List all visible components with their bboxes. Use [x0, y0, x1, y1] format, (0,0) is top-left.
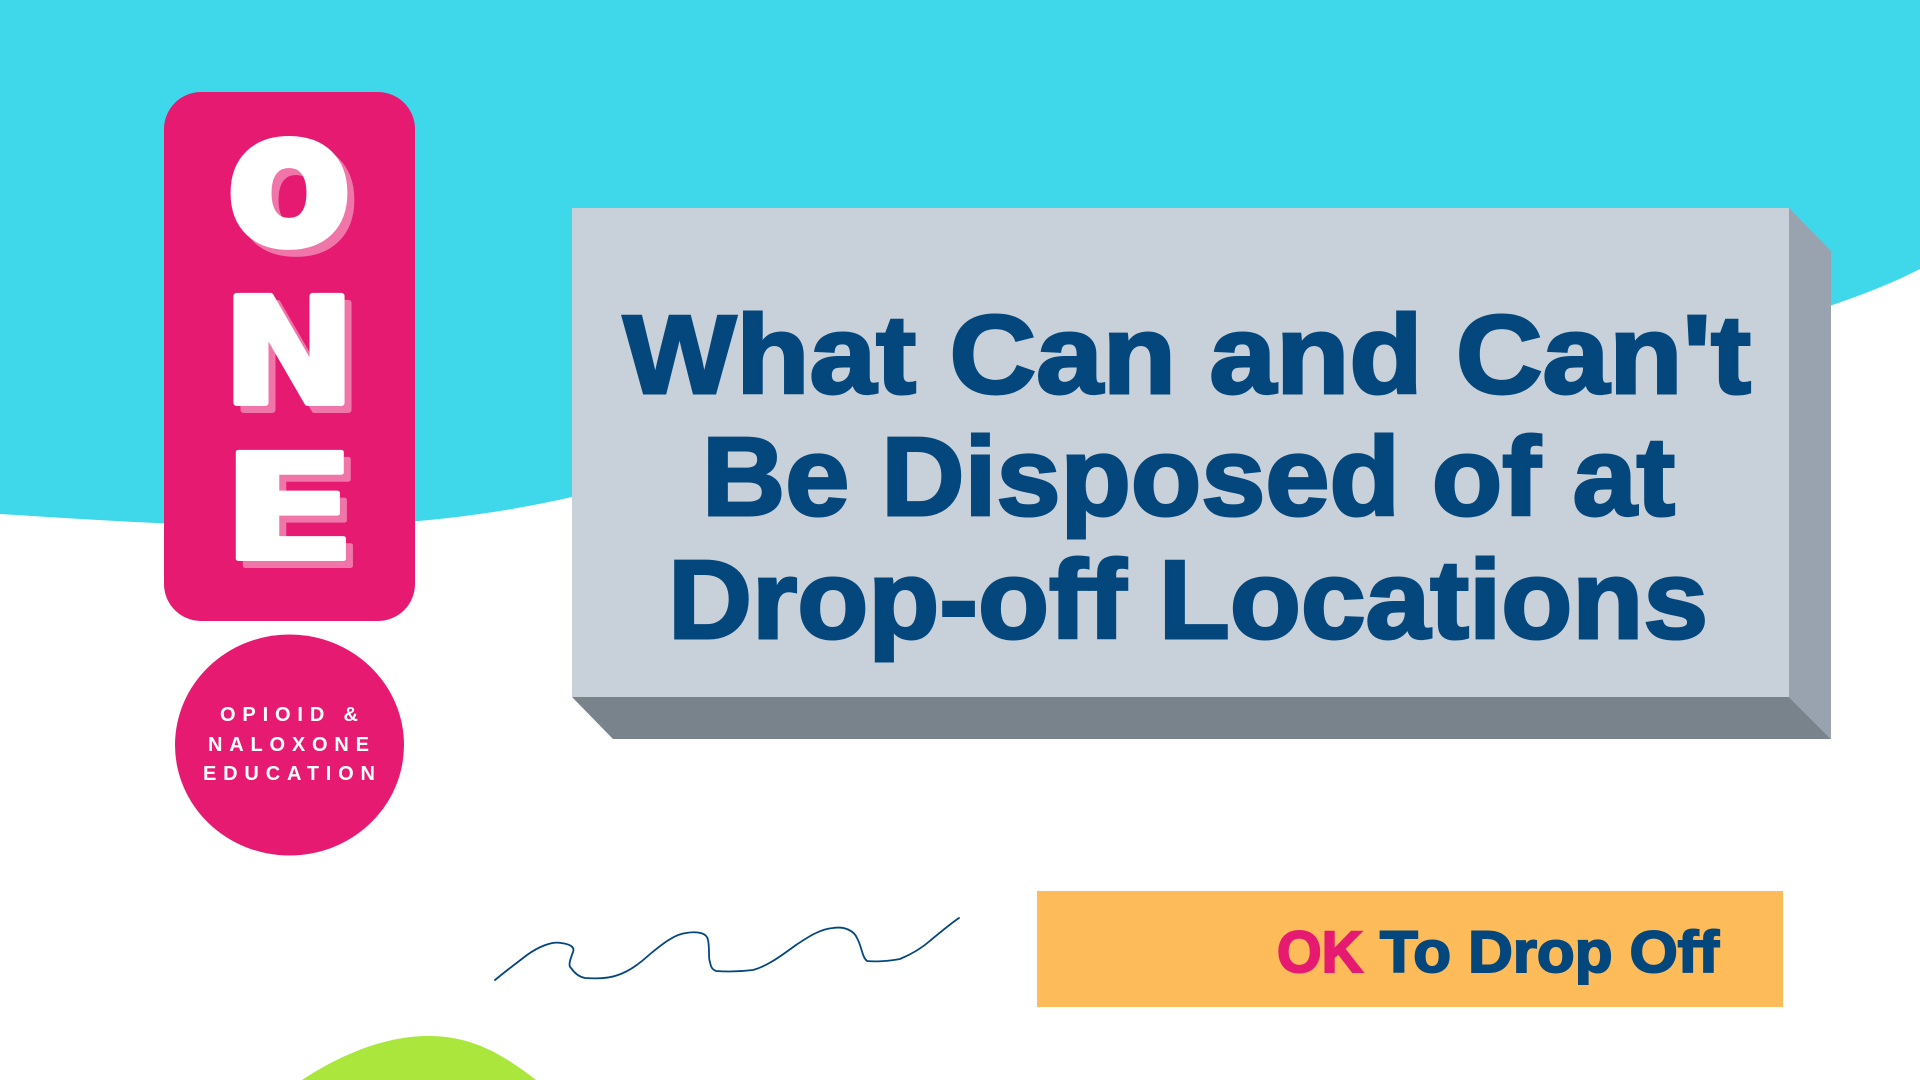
green blob — [302, 1036, 536, 1080]
panel: OK to drop off banner — [1037, 891, 1783, 1007]
panel: opioid and naloxone education badge — [175, 634, 404, 856]
letter N: N — [222, 267, 356, 438]
badge text: EDUCATION — [203, 763, 375, 785]
logo pink panel — [164, 92, 415, 621]
panel: ONE logo — [164, 92, 415, 621]
title — [623, 293, 1751, 662]
letter E — [220, 423, 365, 601]
badge text — [203, 704, 375, 785]
panel: title block — [572, 208, 1831, 739]
badge text: NALOXONE — [208, 734, 369, 756]
block bottom side — [572, 697, 1831, 739]
badge text: OPIOID & — [220, 704, 358, 726]
letter E: E — [227, 430, 365, 601]
banner text: To Drop Off — [1380, 920, 1720, 985]
title: Be Disposed of at — [702, 415, 1675, 539]
badge circle — [175, 634, 404, 856]
letter O: O — [238, 126, 354, 280]
banner text: OK — [1277, 920, 1363, 985]
title: What Can and Can't — [623, 293, 1751, 417]
letter E: E — [220, 423, 358, 594]
letter N: N — [229, 274, 363, 445]
block right side — [1789, 208, 1831, 739]
title: Drop-off Locations — [668, 538, 1708, 662]
squiggle arrow line — [495, 918, 959, 980]
cyan background wave — [0, 0, 1920, 526]
block front face — [572, 208, 1789, 697]
letter O: O — [231, 119, 347, 273]
banner background — [1037, 891, 1783, 1007]
